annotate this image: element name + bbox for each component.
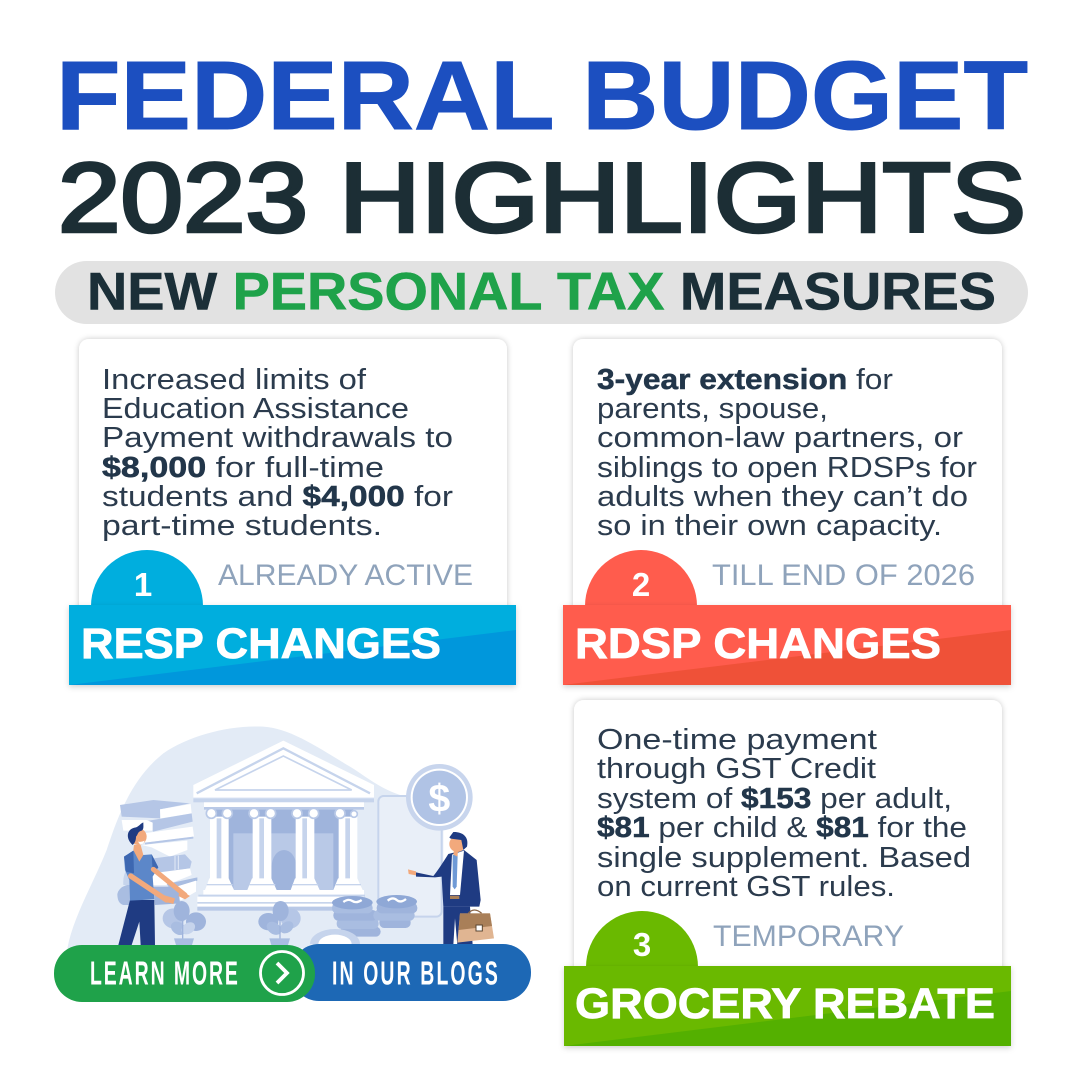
blue segment: [291, 944, 531, 1001]
body text: RESP: Increased limits of: [102, 364, 367, 396]
number badge 1: 1: [134, 566, 152, 603]
title line 1: FEDERAL BUDGET: [56, 41, 1028, 150]
button: learn more in our blogs: [54, 944, 531, 1002]
dollar coin: [406, 764, 473, 831]
background blob: [67, 726, 443, 948]
banner: RESP changes: RESP CHANGES: [81, 620, 441, 668]
body text: RESP: [102, 364, 453, 542]
body text: RDSP: parents, spouse,: [597, 393, 828, 425]
subtitle pill: NEW PERSONAL TAX MEASURES: [87, 262, 996, 322]
number badge 3: 3: [633, 926, 651, 963]
phone outline: [378, 796, 442, 917]
person: student: [118, 822, 190, 945]
banner: grocery rebate: [564, 966, 1011, 1046]
body text: RESP: Education Assistance: [102, 393, 409, 425]
body text: grocery rebate: through GST Credit: [597, 753, 876, 785]
body text: grocery rebate: $81 per child & $81 for the: [597, 812, 967, 844]
banner: RESP changes: [69, 605, 516, 685]
body text: RDSP: adults when they can’t do: [597, 481, 968, 513]
status: temporary: TEMPORARY: [713, 920, 904, 953]
body text: grocery rebate: [597, 724, 971, 903]
body text: grocery rebate: single supplement. Based: [597, 842, 971, 874]
body text: grocery rebate: on current GST rules.: [597, 871, 895, 903]
icon: arrow circle: [260, 952, 304, 994]
body text: RDSP: siblings to open RDSPs for: [597, 452, 977, 484]
title line 2: 2023 HIGHLIGHTS: [58, 142, 1026, 252]
green segment: [54, 945, 315, 1002]
book stack: [117, 800, 197, 905]
potted plants: [163, 901, 301, 945]
panel: RESP changes: [69, 339, 516, 685]
body text: RESP: Payment withdrawals to: [102, 422, 453, 454]
bank building: [193, 741, 374, 911]
banner: RDSP changes: RDSP CHANGES: [575, 620, 941, 668]
label: learn more: LEARN MORE: [90, 954, 238, 992]
status: till end of 2026: TILL END OF 2026: [712, 559, 975, 592]
body text: RDSP: common-law partners, or: [597, 422, 963, 454]
banner: RDSP changes: [563, 605, 1011, 685]
panel: grocery rebate: [564, 700, 1011, 1046]
body text: RESP: part-time students.: [102, 510, 382, 542]
body text: RDSP: 3-year extension for: [597, 364, 893, 396]
number badge 3: [586, 911, 698, 967]
body text: grocery rebate: One-time payment: [597, 724, 877, 756]
person: businessman: [408, 832, 494, 945]
panel: RDSP changes: [563, 339, 1011, 685]
number badge 2: 2: [632, 566, 650, 603]
dollar coin: $: [428, 776, 450, 820]
coin stacks: [310, 895, 417, 944]
status: already active: ALREADY ACTIVE: [218, 559, 473, 592]
body text: RDSP: [597, 364, 977, 542]
body text: grocery rebate: system of $153 per adult,: [597, 783, 952, 815]
body text: RESP: students and $4,000 for: [102, 481, 453, 513]
number badge 1: [91, 550, 203, 606]
label: in our blogs: IN OUR BLOGS: [332, 954, 498, 992]
body text: RDSP: so in their own capacity.: [597, 510, 942, 542]
body text: RESP: $8,000 for full-time: [102, 452, 384, 484]
banner: grocery rebate: GROCERY REBATE: [575, 980, 995, 1028]
illustration: bank with student and businessman: [67, 726, 494, 948]
number badge 2: [585, 550, 697, 606]
